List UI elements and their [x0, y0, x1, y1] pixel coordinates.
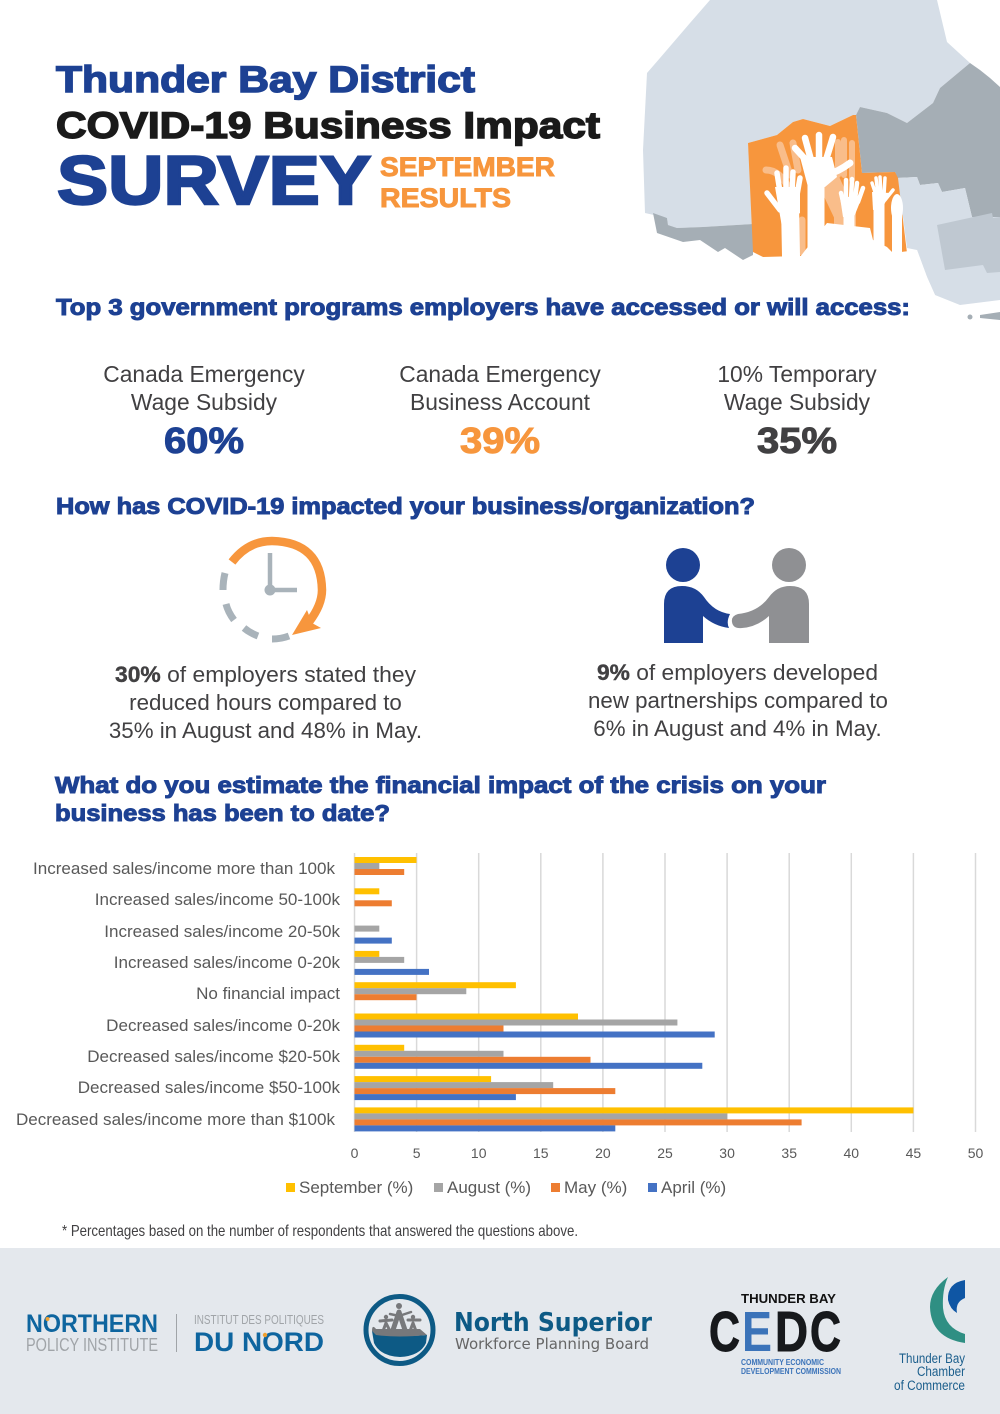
- axis labels: 10: [471, 1145, 487, 1161]
- axis labels: 35: [781, 1145, 797, 1161]
- heading: financial impact: business has been to date?: [55, 800, 390, 826]
- text: partnerships: [588, 660, 888, 741]
- legend: [286, 1178, 726, 1197]
- stat: wage subsidy: Canada Emergency: [103, 361, 305, 387]
- category labels: Increased sales/income 50-100k: [95, 890, 340, 909]
- logo: North Superior Workforce Planning Board: North Superior: [454, 1308, 652, 1338]
- map illustration: [643, 0, 1000, 320]
- axis labels: 40: [844, 1145, 859, 1161]
- series: May: [354, 869, 802, 1125]
- text: reduced hours: 30% of employers stated they: [115, 662, 417, 687]
- bar chart: [16, 853, 983, 1197]
- logo: CEDC: COMMUNITY ECONOMIC: [741, 1358, 824, 1367]
- logo: CEDC: [709, 1291, 841, 1376]
- legend: August (%): [447, 1178, 531, 1197]
- logo: Northern Policy Institute: POLICY INSTITUTE: [26, 1335, 158, 1355]
- stat: business account: [399, 361, 601, 461]
- footer band: [0, 1248, 1000, 1414]
- logo: CEDC: D: [775, 1300, 808, 1364]
- stat: business account: Canada Emergency: [399, 361, 601, 387]
- legend: September (%): [299, 1178, 413, 1197]
- logo: Northern Policy Institute: [26, 1310, 324, 1357]
- text: reduced hours: 35% in August and 48% in May.: [109, 718, 422, 743]
- category labels: Decreased sales/income 0-20k: [106, 1016, 340, 1035]
- text: reduced hours: reduced hours compared to: [129, 690, 402, 715]
- series: September: [354, 857, 913, 1113]
- axis labels: 20: [595, 1145, 611, 1161]
- axis labels: [351, 1145, 983, 1161]
- stat: business account: Business Account: [410, 389, 591, 415]
- category labels: No financial impact: [196, 984, 340, 1003]
- category labels: Increased sales/income 0-20k: [114, 953, 340, 972]
- logo: Thunder Bay Chamber of Commerce: Thunder Bay: [899, 1351, 965, 1366]
- logo: Thunder Bay Chamber of Commerce: Chamber: [917, 1364, 965, 1379]
- axis labels: 45: [906, 1145, 921, 1161]
- heading: financial impact: [55, 772, 826, 826]
- icon: clock: [223, 541, 322, 639]
- title: Thunder Bay District: [56, 58, 476, 100]
- title: [56, 58, 601, 219]
- axis labels: 30: [719, 1145, 735, 1161]
- legend: April (%): [661, 1178, 726, 1197]
- title: SEPTEMBER: [380, 152, 555, 182]
- category labels: Decreased sales/income more than $100k: [16, 1110, 335, 1129]
- axis labels: 5: [413, 1145, 421, 1161]
- logo: Northern Policy Institute: INSTITUT DES POLITIQUES: [194, 1313, 324, 1327]
- axis labels: 0: [351, 1145, 359, 1161]
- axis labels: 25: [657, 1145, 673, 1161]
- logo: Thunder Bay Chamber of Commerce: [894, 1277, 965, 1393]
- text: partnerships: 6% in August and 4% in May.: [593, 716, 882, 741]
- title: SURVEY: [57, 142, 371, 219]
- logo: CEDC: C: [810, 1300, 841, 1364]
- axis labels: 15: [533, 1145, 549, 1161]
- heading: financial impact: What do you estimate the financial impact of the crisis on your: [55, 772, 826, 798]
- text: partnerships: 9% of employers developed: [597, 660, 878, 685]
- icon: handshake: [664, 548, 809, 643]
- logo: North Superior Workforce Planning Board: [366, 1296, 652, 1364]
- logo: Northern Policy Institute: NORTHERN: [26, 1310, 158, 1338]
- series: April: [354, 938, 715, 1131]
- heading: impact: How has COVID-19 impacted your business/organization?: [56, 493, 755, 519]
- stat: temporary wage subsidy: 35%: [757, 420, 837, 461]
- category labels: Increased sales/income more than 100k: [33, 859, 335, 878]
- stat: business account: 39%: [460, 420, 540, 461]
- category labels: Decreased sales/income $20-50k: [87, 1047, 340, 1066]
- legend: May (%): [564, 1178, 627, 1197]
- axis labels: 50: [968, 1145, 983, 1161]
- logo: CEDC: DEVELOPMENT COMMISSION: [741, 1367, 841, 1376]
- category labels: [16, 859, 340, 1129]
- stat: temporary wage subsidy: [717, 361, 877, 461]
- stat: temporary wage subsidy: 10% Temporary: [717, 361, 877, 387]
- stat: wage subsidy: 60%: [164, 420, 244, 461]
- heading: top 3 programs: Top 3 government programs employers have accessed or will access:: [56, 294, 910, 320]
- stat: wage subsidy: [103, 361, 305, 461]
- logo: North Superior Workforce Planning Board: Workforce Planning Board: [455, 1335, 649, 1353]
- category labels: Increased sales/income 20-50k: [104, 922, 340, 941]
- stat: temporary wage subsidy: Wage Subsidy: [724, 389, 871, 415]
- text: partnerships: new partnerships compared to: [588, 688, 888, 713]
- title: RESULTS: [380, 183, 511, 213]
- logo: CEDC: C: [709, 1300, 740, 1364]
- footnote: * Percentages based on the number of respondents that answered the questions above.: [62, 1223, 578, 1240]
- title: COVID-19 Business Impact: [56, 104, 601, 146]
- text: reduced hours: [109, 662, 422, 743]
- category labels: Decreased sales/income $50-100k: [78, 1078, 340, 1097]
- logo: Northern Policy Institute: DU NORD: [194, 1327, 324, 1357]
- logo: CEDC: E: [742, 1300, 772, 1364]
- stat: wage subsidy: Wage Subsidy: [131, 389, 278, 415]
- logo: CEDC: THUNDER BAY: [741, 1291, 836, 1306]
- series: August: [354, 863, 727, 1119]
- logo: Thunder Bay Chamber of Commerce: of Commerce: [894, 1378, 965, 1393]
